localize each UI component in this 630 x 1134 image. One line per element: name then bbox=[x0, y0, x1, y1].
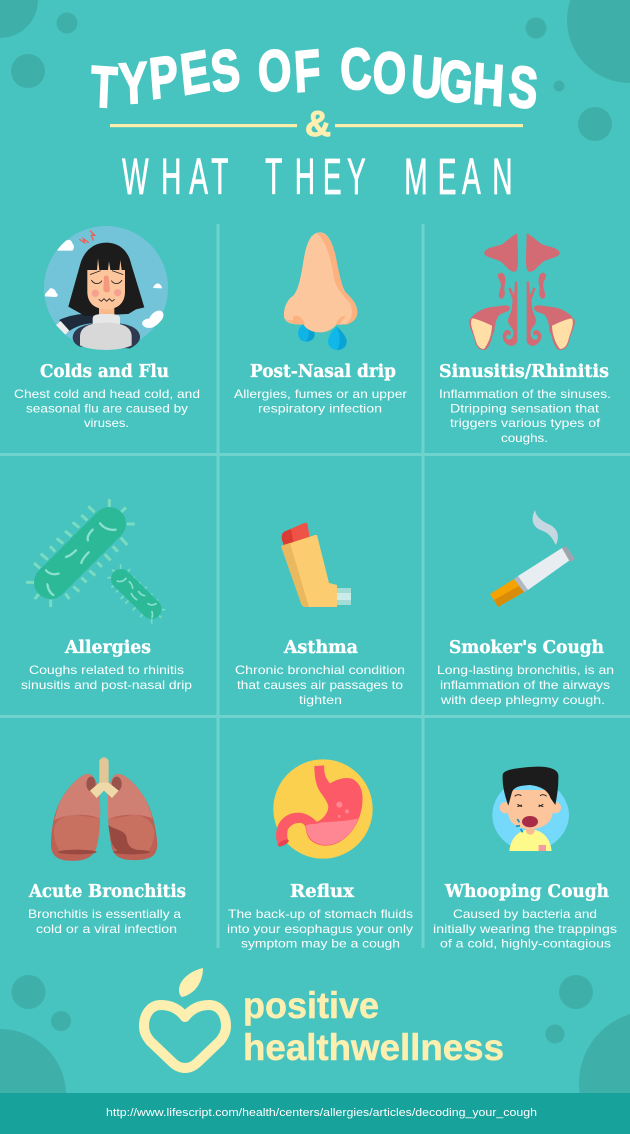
icon: cigarette bbox=[490, 510, 575, 607]
heading: Asthma bbox=[283, 638, 358, 658]
heading: Whooping Cough bbox=[444, 882, 609, 902]
description: seasonal flu are caused by bbox=[26, 402, 188, 416]
description bbox=[433, 907, 617, 950]
footer band bbox=[0, 1093, 630, 1134]
icon: sick woman bbox=[44, 226, 168, 350]
logo wordmark: healthwellness bbox=[243, 1027, 504, 1068]
icon: sinuses bbox=[469, 233, 575, 350]
heading: Reflux bbox=[290, 882, 355, 902]
description: Allergies, fumes or an upper bbox=[234, 387, 407, 401]
ampersand divider bbox=[110, 103, 523, 144]
description bbox=[234, 387, 407, 416]
description: with deep phlegmy cough. bbox=[440, 693, 605, 707]
icon: bacteria bbox=[26, 499, 165, 624]
description: triggers various types of bbox=[450, 416, 601, 430]
panel: reflux bbox=[227, 759, 413, 950]
description: respiratory infection bbox=[258, 402, 382, 416]
description: into your esophagus your only bbox=[227, 922, 413, 936]
panel: whooping cough bbox=[433, 767, 617, 950]
logo: positive healthwellness bbox=[144, 968, 504, 1068]
description bbox=[437, 663, 614, 707]
description bbox=[439, 387, 611, 445]
description: tighten bbox=[299, 693, 342, 707]
description bbox=[28, 907, 181, 936]
panel: colds and flu bbox=[14, 226, 200, 430]
heading: Colds and Flu bbox=[40, 362, 169, 382]
panel: smoker's cough bbox=[437, 510, 614, 707]
heading: types of coughs: TYPES OF COUGHS bbox=[90, 36, 540, 121]
description bbox=[21, 663, 192, 692]
description bbox=[235, 663, 405, 707]
logo wordmark: positive bbox=[243, 985, 379, 1026]
description: coughs. bbox=[501, 431, 548, 445]
heading: Post-Nasal drip bbox=[250, 362, 396, 382]
heading: Acute Bronchitis bbox=[28, 882, 186, 902]
description: that causes air passages to bbox=[237, 678, 403, 692]
panel: sinusitis/rhinitis bbox=[439, 233, 611, 445]
description: Inflammation of the sinuses. bbox=[439, 387, 611, 401]
title bbox=[90, 36, 540, 205]
description: Chest cold and head cold, and bbox=[14, 387, 200, 401]
description: viruses. bbox=[84, 416, 129, 430]
heading: Smoker's Cough bbox=[449, 638, 604, 658]
description: symptom may be a cough bbox=[241, 936, 400, 950]
heading: Allergies bbox=[64, 638, 151, 658]
description: The back-up of stomach fluids bbox=[228, 907, 413, 921]
icon: coughing boy bbox=[492, 767, 569, 851]
description: cold or a viral infection bbox=[36, 922, 177, 936]
panel: acute bronchitis bbox=[28, 757, 186, 936]
panel: asthma bbox=[235, 523, 405, 707]
icon: inhaler bbox=[281, 523, 351, 607]
description: Dtripping sensation that bbox=[450, 402, 600, 416]
source url: http://www.lifescript.com/health/centers/allergies/articles/decoding_your_cough bbox=[106, 1107, 537, 1119]
icon: heart apple bbox=[144, 968, 226, 1068]
heading: Sinusitis/Rhinitis bbox=[439, 362, 609, 382]
description: sinusitis and post-nasal drip bbox=[21, 678, 192, 692]
panel: post-nasal drip bbox=[234, 232, 407, 416]
description bbox=[227, 907, 413, 950]
subheading: what they mean: WHAT THEY MEAN bbox=[122, 148, 513, 205]
description bbox=[14, 387, 200, 430]
description: initially wearing the trappings bbox=[433, 922, 617, 936]
logo wordmark bbox=[243, 985, 504, 1068]
description: Chronic bronchial condition bbox=[235, 663, 405, 677]
description: of a cold, highly-contagious bbox=[440, 936, 611, 950]
description: Long-lasting bronchitis, is an bbox=[437, 663, 614, 677]
description: Bronchitis is essentially a bbox=[28, 907, 181, 921]
description: Caused by bacteria and bbox=[453, 907, 597, 921]
icon: dripping nose bbox=[284, 232, 357, 350]
panel: allergies bbox=[21, 499, 192, 692]
description: Coughs related to rhinitis bbox=[29, 663, 184, 677]
icon: stomach bbox=[273, 759, 373, 859]
description: inflammation of the airways bbox=[440, 678, 610, 692]
icon: lungs bbox=[51, 757, 157, 861]
ampersand divider: & bbox=[305, 103, 331, 144]
